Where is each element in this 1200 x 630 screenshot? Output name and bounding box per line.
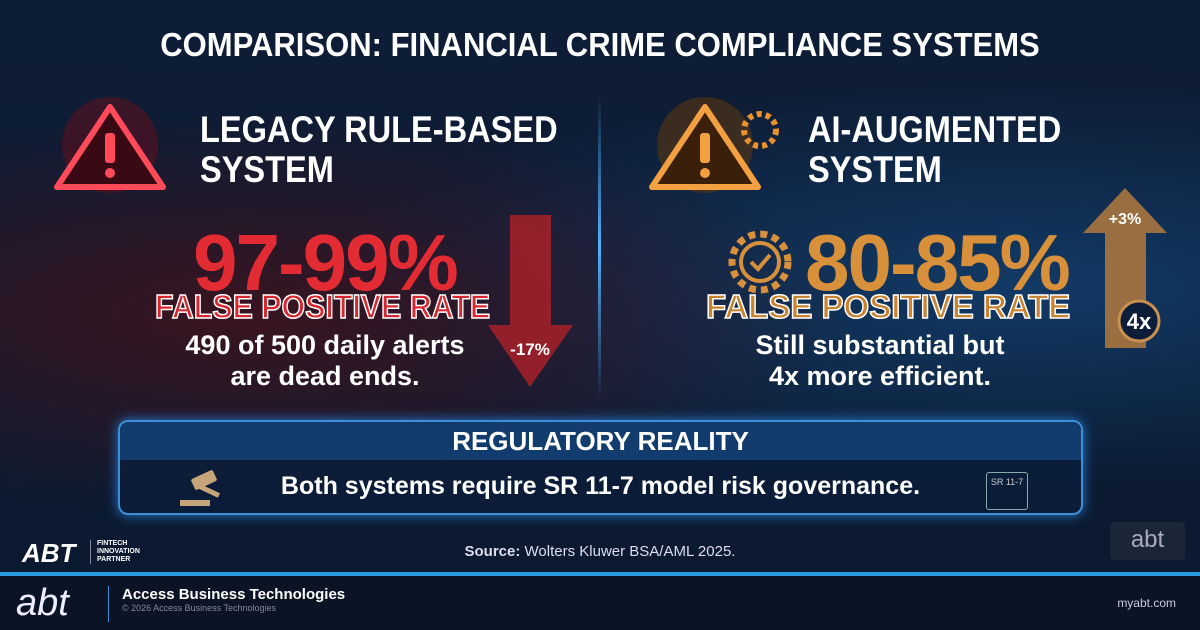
icon: gear check [728,230,792,294]
arrow: +3% up with 4x: 4x [1127,309,1152,334]
text: efficient: 4x more efficient. [769,361,991,391]
text: SR 11-7: Both systems require SR 11-7 model risk governance. [281,472,920,500]
footer url: myabt.com [1117,596,1176,610]
footer [0,572,1200,630]
stat: 97-99%: 97-99% [193,218,457,307]
logo: ABT fintech partner [22,538,140,568]
footer company [108,586,345,622]
arrow: -17% down: -17% [510,340,550,359]
text: dead ends [185,330,465,391]
source: Source: Wolters Kluwer BSA/AML 2025. [465,543,735,560]
text: dead ends: are dead ends. [230,361,420,391]
arrow: +3% up with 4x: +3% [1109,211,1141,228]
icon: orange warning with gear [649,97,779,193]
logo: ABT fintech partner: PARTNER [97,556,130,563]
footer company: © 2026 Access Business Technologies [122,603,276,613]
heading: AI: SYSTEM [808,149,942,190]
heading: regulatory reality [120,422,1081,460]
arrow: -17% down [488,215,573,387]
panel: legacy [54,97,573,391]
icon: document SR 11-7: SR 11-7 [991,477,1023,487]
heading: legacy [200,109,558,190]
logo: ABT fintech partner: ABT [22,538,75,568]
text: dead ends: 490 of 500 daily alerts [185,330,465,360]
heading: AI [808,109,1061,190]
heading: legacy: LEGACY RULE-BASED [200,109,558,150]
footer company: Access Business Technologies [122,586,345,603]
title: COMPARISON: FINANCIAL CRIME COMPLIANCE SYSTEMS [160,26,1040,63]
arrow: +3% up with 4x [1083,188,1167,348]
text: efficient: Still substantial but [755,330,1004,360]
label: false positive rate: FALSE POSITIVE RATE [155,288,490,325]
heading: regulatory reality: REGULATORY REALITY [452,426,749,456]
heading: AI: AI-AUGMENTED [808,109,1061,150]
icon: document SR 11-7 [986,472,1028,510]
logo watermark: abt [1131,526,1164,553]
logo watermark [1110,522,1185,560]
panel: AI [649,97,1167,391]
panel: regulatory reality [118,420,1083,515]
heading: legacy: SYSTEM [200,149,334,190]
text: efficient [755,330,1004,391]
divider [598,95,601,400]
logo: ABT fintech partner: INNOVATION [97,548,140,555]
label: false positive rate: FALSE POSITIVE RATE [706,288,1070,325]
icon: gavel [180,470,220,506]
icon: red warning [54,97,166,193]
footer logo: abt [16,582,69,624]
stat: 80-85%: 80-85% [805,218,1069,307]
logo: ABT fintech partner: FINTECH [97,540,127,547]
